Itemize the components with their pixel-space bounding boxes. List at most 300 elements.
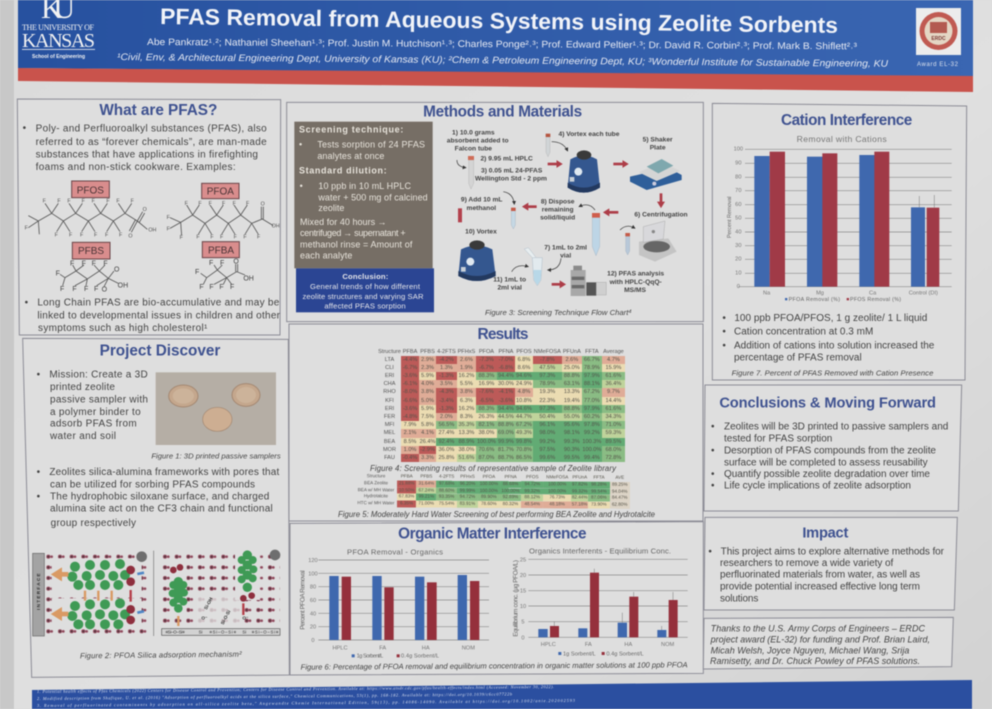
- table: moderately hard water screening: 97.82%: [572, 481, 588, 486]
- University of Kansas logo: KANSAS: [22, 30, 95, 52]
- panel: Impact: Impact: [802, 526, 848, 542]
- table: zeolite library screening heat map: 94.6%: [516, 406, 532, 412]
- zeolite text: Zeolites silica-alumina frameworks with pores that: [49, 467, 280, 478]
- icon: vortex mixer bottom: [458, 240, 496, 281]
- table: zeolite library screening heat map: 88.9%: [458, 439, 474, 445]
- flow chart labels: 10) Vortex: [465, 228, 497, 235]
- flow chart labels: [447, 129, 688, 294]
- flow chart labels: remaining: [542, 207, 574, 214]
- chart: equilibrium concentration: Organics Interferents - Equilibrium Conc.: [529, 546, 671, 555]
- long chain text: Long Chain PFAS are bio-accumulative and may be: [37, 298, 280, 309]
- table: moderately hard water screening: BEA w/ MH Water: [358, 487, 394, 492]
- table: moderately hard water screening: HTC w/ MH Water: [357, 500, 394, 506]
- chart: PFOA removal organics: 0: [311, 638, 315, 644]
- table: moderately hard water screening: 10.50%: [399, 487, 414, 492]
- caption: figure 7: Figure 7. Percent of PFAS Removed with Cation Presence: [732, 368, 933, 377]
- arrows: process flow: [526, 164, 661, 284]
- table: moderately hard water screening: PFOS: [526, 474, 539, 479]
- intro text: [23, 123, 267, 173]
- table: zeolite library screening heat map: 4.8%: [518, 389, 530, 395]
- table: zeolite library screening heat map: -6.7%: [479, 365, 494, 371]
- table: moderately hard water screening: PFOA: [483, 474, 495, 479]
- panel: Cation Interference: [712, 103, 967, 380]
- zeolite text: can be utilized for sorbing PFAS compounds: [50, 479, 255, 490]
- table: moderately hard water screening: 48.18%: [549, 502, 565, 507]
- table: zeolite library screening heat map: FAU: [384, 455, 395, 461]
- table: zeolite library screening heat map: 88.1%: [584, 381, 600, 387]
- table: zeolite library screening heat map: ERI: [385, 373, 394, 379]
- chart: PFOA removal organics: [299, 548, 489, 659]
- mission text: [37, 369, 148, 442]
- table: zeolite library screening heat map: 81.7%: [498, 447, 514, 453]
- table: zeolite library screening heat map: 100.3%: [582, 439, 601, 445]
- chart: PFOA removal organics: NOM: [462, 645, 475, 651]
- table: zeolite library screening heat map: PFNA: [498, 349, 513, 355]
- table: zeolite library screening heat map: -7.6%: [479, 389, 494, 395]
- mission text: water and soil: [49, 431, 116, 442]
- photo: 3D printed passive samplers: [156, 372, 276, 445]
- table: moderately hard water screening: 84.47%: [612, 495, 627, 500]
- table: moderately hard water screening: 88.60%: [439, 487, 454, 492]
- table: zeolite library screening heat map: 4.7%: [607, 356, 620, 362]
- diagram: PFOA silica adsorption, surface view: Si-OH: [203, 596, 214, 610]
- table: zeolite library screening heat map: 82.1%: [478, 422, 494, 428]
- table: zeolite library screening heat map: -7.8%: [540, 356, 555, 362]
- blue box: conclusion: Conclusion:: [342, 272, 388, 281]
- table: zeolite library screening heat map: 4-2FTS: [437, 349, 456, 355]
- chart: equilibrium concentration: [513, 546, 688, 657]
- table: zeolite library screening heat map: -6.7%: [403, 365, 417, 371]
- table: moderately hard water screening: NMeFOSA: [546, 474, 568, 479]
- chart: removal with cations: 50: [735, 216, 741, 222]
- table: zeolite library screening heat map: ERI: [385, 406, 394, 412]
- blue box: conclusion: affected PFAS sorption: [324, 301, 406, 310]
- table: moderately hard water screening: 75.54%: [439, 501, 454, 506]
- footer references: 3. Removal of perfluorinated contaminants by adsorption on all-silica zeolite beta," Angewandte Chemie International Edition, 59(13), pp. 14086-14090. Available at https://doi.org/10.1002/anie.202002593: [37, 698, 575, 709]
- table: zeolite library screening heat map: 3.5%: [440, 381, 453, 387]
- zeolite text: alumina site act on the CF3 chain and functional: [50, 504, 273, 515]
- table: zeolite library screening heat map: 24.9%: [516, 381, 532, 387]
- grey box: screening technique: water + 500 mg of calcined: [317, 192, 428, 202]
- table: zeolite library screening heat map: NMeFOSA: [534, 349, 561, 355]
- flow chart labels: 7) 1mL to 2ml: [544, 244, 587, 251]
- table: zeolite library screening heat map: 49.3%: [516, 430, 532, 436]
- table: zeolite library screening heat map: 88.8%: [564, 406, 580, 412]
- chart: removal with cations: 40: [735, 229, 741, 235]
- heading: Cation Interference: [781, 112, 912, 129]
- table: zeolite library screening heat map: 50.4%: [539, 414, 555, 420]
- table: zeolite library screening heat map: 2.0%: [440, 414, 453, 420]
- intro text: foams and non-stick cookware. Examples:: [36, 162, 236, 173]
- table: zeolite library screening heat map: 98.0%: [539, 430, 555, 436]
- table: moderately hard water screening: 31.64%: [419, 480, 434, 485]
- table: zeolite library screening heat map: 59.3%: [605, 430, 621, 436]
- chart: equilibrium concentration: 1g Sorbent/L: [563, 651, 596, 657]
- table: zeolite library screening heat map: 99.6%: [539, 455, 555, 461]
- table: moderately hard water screening: 76.73%: [549, 495, 565, 500]
- panel: Conclusions & Moving Forward: •: [711, 469, 715, 480]
- table: zeolite library screening heat map: 26.4%: [420, 439, 435, 445]
- table: zeolite library screening heat map: 44.7%: [516, 414, 532, 420]
- table: zeolite library screening heat map: 92.4%: [438, 439, 454, 445]
- table: moderately hard water screening: BEA Zeolite: [364, 480, 388, 485]
- table: zeolite library screening heat map: 70.8%: [516, 447, 532, 453]
- panel: acknowledgements: Thanks to the U.S. Army Corps of Engineers – ERDC: [711, 624, 925, 634]
- panel: acknowledgements: [703, 617, 953, 669]
- table: moderately hard water screening: 57.18%: [572, 502, 587, 507]
- heading: Project Discover: [100, 342, 220, 359]
- chart: removal with cations: PFOA Removal (%): [789, 297, 840, 303]
- flow chart labels: 2) 9.95 mL HPLC: [480, 156, 533, 163]
- table: zeolite library screening heat map: 2.1%: [404, 430, 416, 436]
- diagram: PFOA silica adsorption, interface view: [33, 551, 150, 638]
- table: zeolite library screening heat map: 47.5%: [539, 365, 555, 371]
- table: zeolite library screening heat map: CHA: [384, 381, 395, 387]
- table: zeolite library screening heat map: 63.1%: [564, 381, 580, 387]
- panel: Impact: provide potential increased effective long term: [720, 582, 920, 593]
- chart: PFOA removal organics: 20: [310, 625, 316, 631]
- table: zeolite library screening heat map: 26.3%: [478, 414, 494, 420]
- table: zeolite library screening heat map: PFUnA: [563, 349, 581, 355]
- diagram: PFOA silica adsorption, surface view: Si-O-Si: [220, 609, 232, 625]
- table: zeolite library screening heat map: -6.1%: [403, 381, 417, 387]
- flow chart labels: 12) PFAS analysis: [607, 271, 664, 278]
- flow chart labels: vial: [560, 252, 571, 259]
- heading: What are PFAS?: [99, 102, 217, 119]
- chart: PFOA removal organics: FA: [379, 645, 386, 651]
- chart: removal with cations: Ca: [869, 291, 877, 297]
- table: moderately hard water screening: Structure: [367, 473, 385, 478]
- mission text: adsorb PFAS from: [50, 419, 137, 430]
- table: zeolite library screening heat map: 6.3%: [460, 398, 473, 404]
- table: zeolite library screening heat map: 68.0%: [605, 447, 621, 453]
- table: moderately hard water screening: 21.88%: [399, 480, 415, 485]
- diagram: PFOA silica adsorption, surface view: O⁻: [201, 615, 208, 620]
- PFBA structure: PFBA: [208, 245, 234, 256]
- table: moderately hard water screening: [357, 473, 630, 509]
- table: zeolite library screening heat map: FFTA: [585, 349, 599, 355]
- chart: equilibrium concentration: 10: [520, 604, 526, 610]
- table: zeolite library screening heat map: 13.3%: [458, 430, 474, 436]
- table: moderately hard water screening: 48.54%: [524, 501, 540, 506]
- table: zeolite library screening heat map: [378, 348, 626, 463]
- panel: Conclusions & Moving Forward: Life cycle implications of zeolite adsorption: [724, 481, 911, 492]
- University of Kansas logo: THE UNIVERSITY OF: [22, 23, 95, 32]
- table: moderately hard water screening: 97.68%: [439, 480, 455, 486]
- panel: Impact: researchers to remove a wide variety of: [720, 558, 894, 569]
- table: zeolite library screening heat map: 88.8%: [564, 373, 580, 379]
- table: zeolite library screening heat map: 19.3%: [539, 389, 555, 395]
- table: zeolite library screening heat map: 99.5%: [564, 455, 580, 461]
- chart: PFOA removal organics: 0.4g Sorbent/L: [401, 653, 439, 659]
- grey box: screening technique: Mixed for 40 hours →: [300, 217, 387, 227]
- grey box: screening technique: •: [300, 181, 303, 191]
- table: moderately hard water screening: AVE: [615, 475, 624, 480]
- table: zeolite library screening heat map: -4.3%: [439, 389, 454, 395]
- PFBS structure: [56, 242, 128, 294]
- flow chart labels: 11) 1mL to: [493, 277, 526, 284]
- chart: equilibrium concentration: 5: [521, 620, 525, 626]
- table: zeolite library screening heat map: -1.3%: [439, 406, 454, 412]
- table: zeolite library screening heat map: 88.3%: [478, 406, 494, 412]
- mission text: •: [37, 369, 41, 380]
- flow chart labels: 2ml vial: [497, 285, 522, 292]
- flow chart labels: 5) Shaker: [643, 137, 673, 144]
- table: zeolite library screening heat map: 7.5%: [421, 414, 434, 420]
- cation bullet list: •: [722, 340, 726, 351]
- table: zeolite library screening heat map: 10.8%: [516, 398, 532, 404]
- table: zeolite library screening heat map: PFBA: [403, 349, 417, 355]
- table: zeolite library screening heat map: 5.5%: [460, 381, 473, 387]
- table: zeolite library screening heat map: 94.4%: [498, 406, 514, 412]
- diagram: PFOA silica adsorption, surface view: O⁻: [242, 615, 249, 620]
- flow chart labels: 6) Centrifugation: [634, 211, 688, 218]
- table: moderately hard water screening: 100.00%: [480, 481, 498, 486]
- table: zeolite library screening heat map: -3.4%: [439, 398, 454, 404]
- table: zeolite library screening heat map: -3.6%: [403, 406, 417, 412]
- heading: Organic Matter Interference: [398, 525, 586, 542]
- panel: Organic Matter Interference: [290, 522, 703, 675]
- table: moderately hard water screening: 80.32%: [503, 501, 518, 506]
- chart: PFOA removal organics: 80: [310, 585, 316, 591]
- table: moderately hard water screening: 98.28%: [591, 481, 607, 486]
- chart: equilibrium concentration: Equilibrium conc. (µg PFOA/L): [513, 560, 520, 637]
- table: zeolite library screening heat map: 16.2%: [458, 406, 474, 412]
- panel: Impact: solutions: [720, 594, 758, 605]
- table: zeolite library screening heat map: 87.0%: [478, 455, 494, 461]
- diagram: PFOA silica adsorption, surface view: ≡Si–O–Si≡: [252, 630, 279, 635]
- flow chart labels: with HPLC-QqQ-: [609, 279, 662, 286]
- caption: figure 4: Figure 4: Screening results of representative sample of Zeolite library: [370, 464, 617, 473]
- table: zeolite library screening heat map: 35.3%: [458, 422, 474, 428]
- PFBS structure: OH: [118, 283, 128, 290]
- table: zeolite library screening heat map: 36.0%: [438, 447, 454, 453]
- table: zeolite library screening heat map: 100.0%: [477, 439, 496, 445]
- table: moderately hard water screening: 100.00%: [548, 488, 566, 493]
- panel: Conclusions & Moving Forward: •: [711, 481, 715, 492]
- chart: equilibrium concentration: HA: [624, 642, 632, 648]
- table: moderately hard water screening: 71.00%: [418, 501, 434, 506]
- chart: PFOA removal organics: HA: [422, 645, 430, 651]
- table: zeolite library screening heat map: 61.6%: [605, 406, 621, 412]
- panel: Impact: This project aims to explore alternative methods for: [721, 546, 945, 557]
- chart: removal with cations: PFOS Removal (%): [850, 297, 901, 303]
- table: zeolite library screening heat map: 8.3%: [460, 414, 473, 420]
- table: zeolite library screening heat map: -4.1%: [499, 389, 513, 395]
- chart: equilibrium concentration: 0: [521, 635, 525, 641]
- table: zeolite library screening heat map: 1.0%: [404, 447, 416, 453]
- PFOA structure: PFOA: [207, 187, 234, 198]
- icon: centrifuge: [639, 221, 677, 262]
- table: zeolite library screening heat map: KFI: [385, 398, 394, 404]
- flow chart: [447, 129, 688, 296]
- chart: equilibrium concentration: 15: [520, 589, 526, 595]
- table: zeolite library screening heat map: 38.0%: [478, 430, 494, 436]
- chart: removal with cations: 80: [735, 175, 741, 181]
- cation bullet list: [722, 313, 935, 364]
- table: zeolite library screening heat map: 95.6%: [564, 422, 580, 428]
- zeolite text: •: [37, 467, 41, 478]
- table: zeolite library screening heat map: 70.6%: [478, 447, 494, 453]
- heading: Results: Results: [478, 326, 528, 343]
- panel: Project Discover: [23, 338, 289, 677]
- table: zeolite library screening heat map: 4.0%: [421, 381, 434, 387]
- table: zeolite library screening heat map: 88.7%: [498, 455, 514, 461]
- table: zeolite library screening heat map: 34.3%: [605, 414, 621, 420]
- panel: Impact: [704, 517, 957, 610]
- flow chart labels: Plate: [650, 145, 666, 152]
- table: zeolite library screening heat map: 16.9%: [478, 381, 494, 387]
- diagram: PFOA silica adsorption, surface view: ≡Si–O–Si≡: [209, 630, 236, 635]
- footer references: 1. Potential health effects of Pfas Chemicals (2022) Centers for Disease Control and Prevention; Centers for Disease Control and Prevention. Available at: https://www.atsdr.cdc.gov/pfas/health-effects/index.html (Accessed: November 30, 2022).: [37, 684, 554, 695]
- table: zeolite library screening heat map: 77.0%: [584, 398, 600, 404]
- table: zeolite library screening heat map: 97.3%: [539, 373, 555, 379]
- chart: PFOA removal organics: 40: [310, 611, 316, 617]
- table: zeolite library screening heat map: -4.2%: [439, 356, 454, 362]
- ERDC award logo: [916, 8, 961, 68]
- table: moderately hard water screening: 89.25%: [612, 482, 628, 487]
- table: zeolite library screening heat map: FER: [384, 414, 395, 420]
- table: zeolite library screening heat map: 2.9%: [421, 356, 434, 362]
- panel: Results: [289, 324, 703, 521]
- PFOS structure: PFOS: [77, 185, 104, 196]
- table: moderately hard water screening: 4-2FTS: [439, 474, 454, 479]
- diagram: PFOA silica adsorption, surface view: [154, 549, 280, 636]
- table: zeolite library screening heat map: -0.4%: [403, 455, 417, 461]
- table: moderately hard water screening: 82.44%: [572, 495, 587, 500]
- table: zeolite library screening heat map: -4.8%: [403, 414, 417, 420]
- table: zeolite library screening heat map: Average: [603, 349, 624, 355]
- chart: PFOA removal organics: 100: [308, 571, 318, 577]
- PFBS structure: PFBS: [78, 246, 104, 257]
- icon: sample vial: [524, 248, 542, 286]
- panel: acknowledgements: Ramisetty, and Dr. Chuck Powley of PFAS solutions.: [710, 656, 920, 666]
- table: zeolite library screening heat map: 27.4%: [438, 430, 454, 436]
- chart: removal with cations: 100: [734, 147, 743, 153]
- table: zeolite library screening heat map: 1.3%: [440, 365, 453, 371]
- panel: Conclusions & Moving Forward: surface will be completed to assess reusability: [724, 457, 928, 468]
- zeolite text: The hydrophobic siloxane surface, and charged: [50, 491, 269, 502]
- flow chart labels: absorbent added to: [447, 137, 509, 144]
- table: zeolite library screening heat map: 5.9%: [421, 373, 434, 379]
- table: moderately hard water screening: 88.12%: [524, 495, 540, 500]
- table: zeolite library screening heat map: 36.4%: [605, 381, 621, 387]
- chart: equilibrium concentration: NOM: [661, 642, 675, 648]
- panel: Conclusions & Moving Forward: Conclusions & Moving Forward: [719, 395, 936, 411]
- table: zeolite library screening heat map: 99.8%: [516, 439, 532, 445]
- cation bullet list: •: [722, 313, 726, 324]
- blue box: conclusion: zeolite structures and varying SAR: [302, 292, 424, 301]
- table: moderately hard water screening: PFBS: [420, 474, 432, 479]
- table: zeolite library screening heat map: 4.1%: [421, 430, 434, 436]
- affiliations: ¹Civil, Env, & Architectural Engineering Dept, University of Kansas (KU); ²Chem & Petroleum Engineering Dept, KU; ³Wonderful Institute for Sustainable Engineering, KU: [117, 52, 888, 70]
- table: zeolite library screening heat map: 6.8%: [518, 356, 530, 362]
- flow chart labels: methanol: [467, 205, 496, 212]
- table: zeolite library screening heat map: 25.8%: [438, 455, 454, 461]
- long chain text: symptoms such as high cholesterol¹: [38, 323, 208, 334]
- table: moderately hard water screening: 87.06%: [591, 495, 607, 500]
- table: zeolite library screening heat map: PFBS: [420, 349, 435, 355]
- table: zeolite library screening heat map: 69.0%: [498, 430, 514, 436]
- table: zeolite library screening heat map: -6.5%: [479, 398, 494, 404]
- table: zeolite library screening heat map: 97.5%: [539, 447, 555, 453]
- chart: PFOA removal organics: HPLC: [332, 645, 348, 651]
- PFBA structure: OH: [243, 275, 254, 282]
- PFBS structure: OO: [102, 267, 120, 294]
- table: zeolite library screening heat map: 38.0%: [458, 447, 474, 453]
- chart: PFOA removal organics: 60: [310, 598, 316, 604]
- table: zeolite library screening heat map: 100.0%: [582, 447, 601, 453]
- table: zeolite library screening heat map: MOR: [383, 447, 396, 453]
- table: zeolite library screening heat map: 72.8%: [605, 455, 621, 461]
- grey box: screening technique: Screening technique:: [299, 124, 403, 134]
- mission text: Mission: Create a 3D: [49, 369, 148, 380]
- header banner: [18, 0, 973, 92]
- table: zeolite library screening heat map: 5.0%: [421, 398, 434, 404]
- grey box: screening technique: centrifuged → supernatant +: [300, 228, 406, 238]
- table: zeolite library screening heat map: 5.8%: [421, 422, 434, 428]
- grey box: screening technique: Tests sorption of 24 PFAS: [317, 140, 425, 150]
- chart: removal with cations: 30: [735, 243, 741, 249]
- table: zeolite library screening heat map: BEA: [384, 439, 395, 445]
- intro text: Poly- and Perfluoroalkyl substances (PFAS), also: [36, 124, 267, 135]
- chart: removal with cations: 60: [735, 202, 741, 208]
- flow chart labels: solid/liquid: [540, 215, 575, 222]
- table: zeolite library screening heat map: 44.5%: [498, 414, 514, 420]
- table: moderately hard water screening: 100.00%: [548, 481, 566, 486]
- flow chart labels: Wellington Std - 2 ppm: [475, 176, 547, 183]
- intro text: •: [23, 123, 27, 134]
- table: zeolite library screening heat map: -4.4%: [403, 356, 417, 362]
- table: zeolite library screening heat map: 86.5%: [516, 455, 532, 461]
- table: zeolite library screening heat map: 94.4%: [498, 373, 514, 379]
- table: moderately hard water screening: 94.72%: [524, 481, 540, 486]
- table: moderately hard water screening: 100.00%: [480, 488, 498, 493]
- chart: removal with cations: Removal with Cations: [797, 134, 887, 144]
- mission text: a polymer binder to: [50, 407, 141, 418]
- zeolite text: group respectively: [51, 518, 136, 529]
- table: moderately hard water screening: PFHxS: [460, 474, 475, 479]
- chart: removal with cations: Control (DI): [909, 291, 938, 297]
- table: zeolite library screening heat map: 19.4%: [564, 398, 580, 404]
- caption: figure 5: Figure 5: Moderately Hard Water Screening of best performing BEA Zeolite and Hydrotalcite: [338, 510, 656, 519]
- PFBA structure: FFFFFFF: [195, 260, 234, 291]
- table: moderately hard water screening: 67.24%: [418, 487, 434, 492]
- table: zeolite library screening heat map: 14.4%: [605, 398, 621, 404]
- table: zeolite library screening heat map: -3.6%: [403, 373, 417, 379]
- footer references: [32, 680, 972, 709]
- grey box: screening technique: 10 ppb in 10 mL HPLC: [318, 181, 411, 191]
- icon: shaker plate: [630, 159, 682, 190]
- chart: removal with cations: 90: [735, 161, 741, 167]
- chart: PFOA removal organics: PFOA Removal - Organics: [347, 548, 443, 557]
- table: moderately hard water screening: 99.21%: [418, 494, 434, 499]
- panel: Conclusions & Moving Forward: •: [711, 421, 715, 432]
- table: moderately hard water screening: 99.54%: [591, 488, 607, 493]
- panel: Impact: perfluorinated materials from water, as well as: [720, 570, 920, 581]
- heading: Methods and Materials: [423, 104, 582, 121]
- grey box: screening technique: methanol rinse = Amount of: [300, 239, 413, 249]
- table: zeolite library screening heat map: CLI: [385, 365, 394, 371]
- panel: Conclusions & Moving Forward: tested for PFAS sorption: [724, 433, 832, 444]
- chart: equilibrium concentration: HPLC: [541, 642, 556, 648]
- table: zeolite library screening heat map: 97.3%: [539, 406, 555, 412]
- table: moderately hard water screening: 62.80%: [612, 502, 627, 507]
- cation bullet list: Addition of cations into solution increased the: [734, 340, 935, 351]
- table: zeolite library screening heat map: 3.8%: [421, 389, 434, 395]
- long chain text: [25, 298, 281, 334]
- table: zeolite library screening heat map: 88.3%: [478, 373, 494, 379]
